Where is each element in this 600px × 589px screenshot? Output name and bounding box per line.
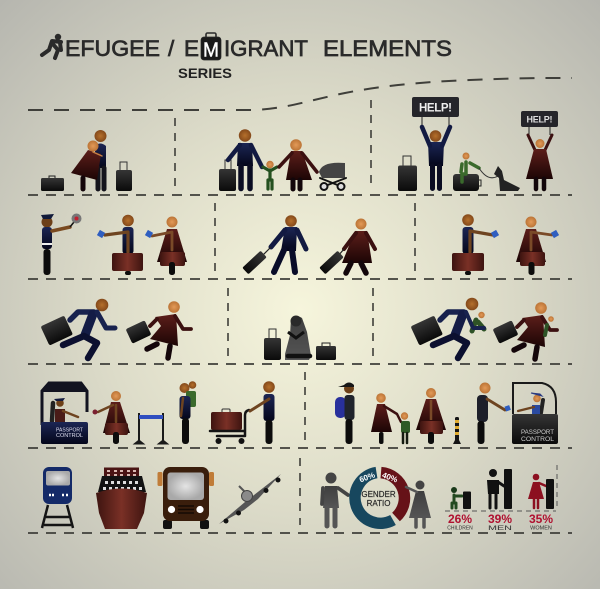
children [447, 487, 473, 532]
flat suitcase [41, 176, 64, 191]
man handing passport at booth [477, 382, 511, 444]
man carrying child in backpack [180, 381, 196, 444]
children: 26% [448, 512, 472, 526]
woman figure [406, 480, 431, 527]
border officer with stop paddle [41, 214, 82, 275]
men: 39% [488, 512, 512, 526]
passport booth, right: PASSPORT [521, 430, 554, 436]
donut ring: 40% [381, 471, 399, 484]
icon: train [42, 467, 73, 528]
passport booth, left: PASSPORT [56, 428, 84, 434]
donut ring: 60% [358, 471, 376, 484]
man figure [322, 472, 348, 526]
running man with child [411, 298, 485, 358]
men [487, 469, 512, 532]
title [42, 33, 452, 62]
icon: suitcase letter M: M [203, 40, 219, 62]
man with cap and backpack [335, 382, 354, 444]
man pushing luggage cart [210, 381, 275, 444]
infographic: gender ratio donut: RATIO [367, 499, 390, 508]
woman showing passport with suitcase [145, 216, 187, 275]
stroller [319, 163, 346, 190]
children: CHILDREN [447, 526, 473, 532]
icon: suitcase letter M [201, 33, 221, 62]
woman at booth with passport [92, 391, 130, 444]
man showing passport with suitcase [97, 215, 143, 275]
seated person with head in hands [285, 316, 311, 360]
donut label: GENDER [361, 490, 396, 499]
help man with sign [412, 97, 459, 188]
woman with suitcase, back view [416, 388, 446, 444]
upright suitcase [398, 156, 417, 191]
walking woman with suitcase [319, 218, 375, 274]
passport booth, right [512, 383, 558, 444]
title: ELEMENTS [323, 36, 452, 61]
running man with briefcase [41, 299, 115, 358]
title: EFUGEE [65, 36, 160, 61]
small suitcase beside seated person [316, 343, 336, 360]
man showing passport with suitcase, right [452, 214, 499, 275]
donut ring [355, 471, 404, 523]
child on suitcase with dog [453, 152, 520, 191]
help man with sign: HELP! [419, 102, 452, 114]
infographic: gender ratio donut [322, 471, 431, 527]
men: MEN [488, 526, 512, 532]
running woman with briefcase [126, 301, 191, 358]
chart: demographics bars [445, 465, 557, 532]
striped bollard [453, 417, 461, 444]
help woman with sign [521, 111, 558, 189]
title: IGRANT [224, 36, 308, 61]
women: WOMEN [530, 526, 552, 532]
icon: ship [96, 468, 147, 529]
women: 35% [529, 512, 553, 526]
running woman with child [493, 302, 557, 359]
walking man with suitcase [242, 215, 306, 274]
woman holding child's hand [371, 393, 410, 444]
icon: running person [42, 34, 61, 58]
title: E [184, 36, 199, 61]
icon: bus [158, 467, 214, 529]
title: / [168, 36, 175, 61]
rope barrier [134, 413, 168, 444]
passport booth, left [41, 383, 88, 444]
subtitle: SERIES [178, 65, 232, 81]
passport booth, right: CONTROL [521, 437, 555, 443]
embracing couple [71, 130, 106, 189]
passport booth, left: CONTROL [56, 433, 83, 439]
roller suitcase [116, 162, 132, 191]
icon: airplane [219, 474, 281, 524]
woman showing passport with suitcase, right [516, 216, 559, 275]
women [528, 474, 554, 532]
help woman with sign: HELP! [526, 114, 552, 124]
family with suitcase and stroller [219, 129, 317, 191]
suitcase beside seated person [264, 329, 281, 360]
